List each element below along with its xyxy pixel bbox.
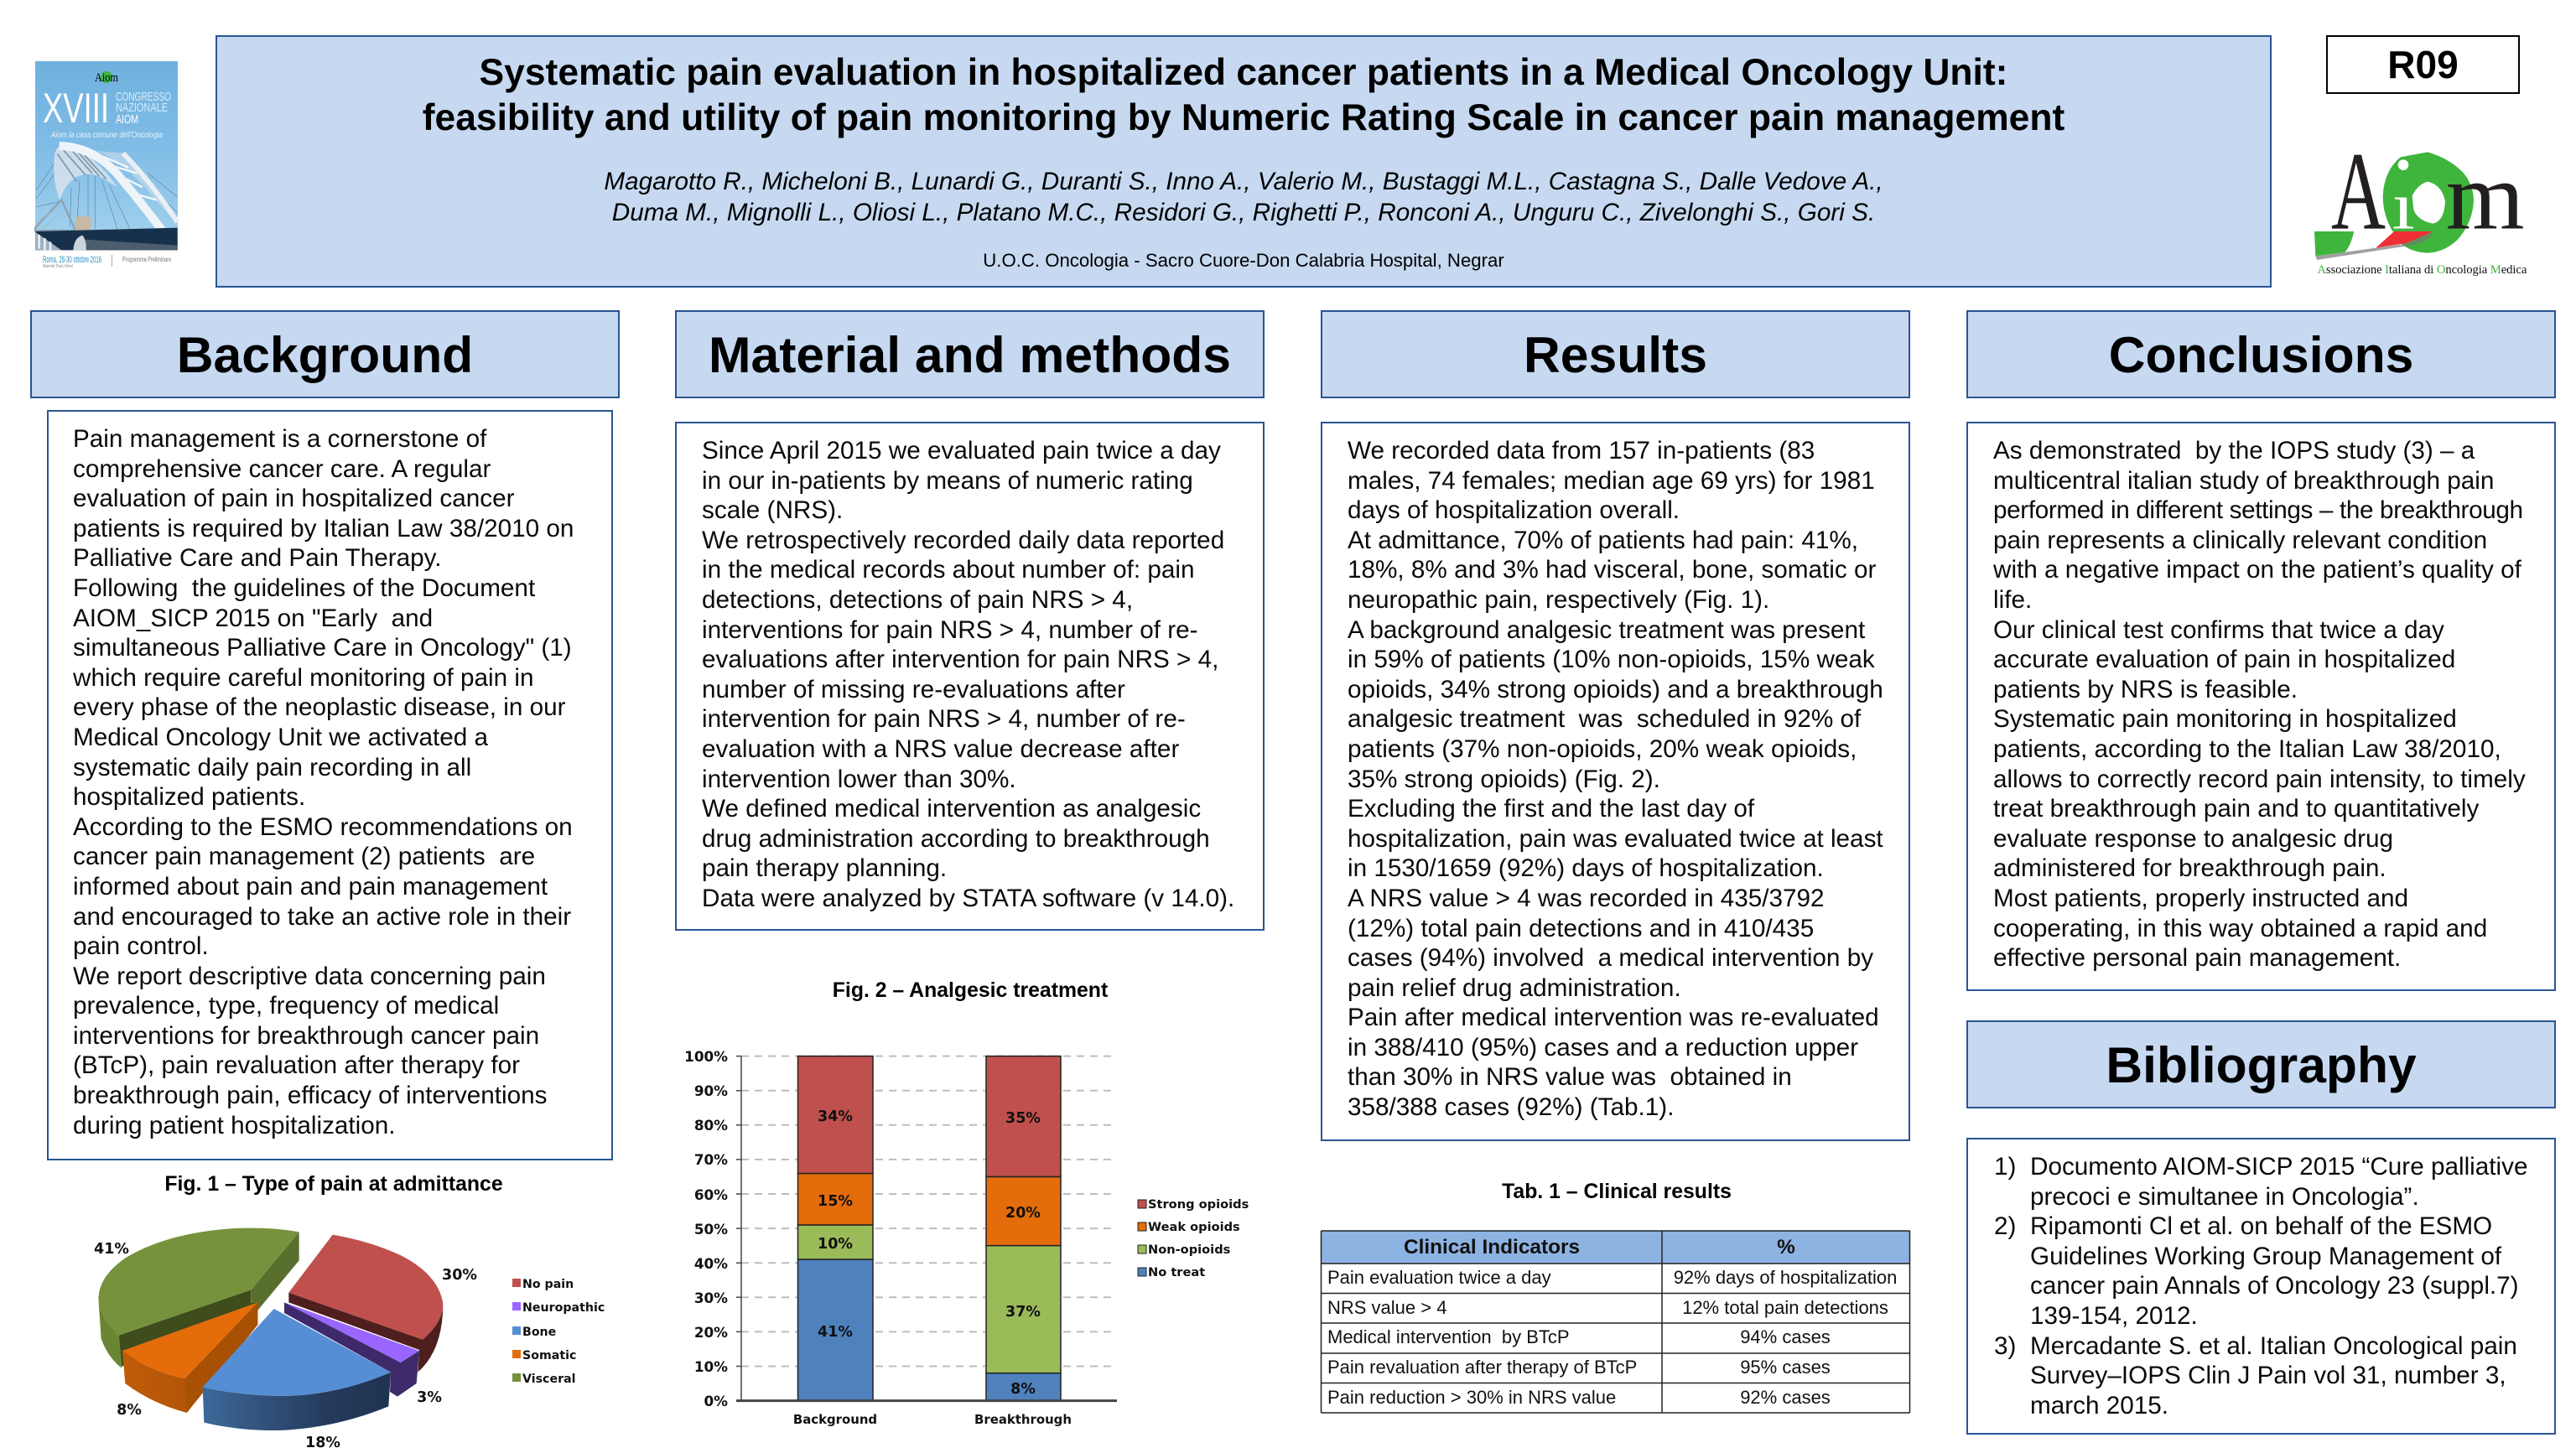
Tab. 1: clinical results table: NRS value > 4 — [1327, 1297, 1446, 1318]
Tab. 1: clinical results table: Medical intervention by BTcP — [1327, 1326, 1570, 1347]
Tab. 1: clinical results table: 92% days of hospitalization — [1674, 1267, 1897, 1288]
Fig. 2 legend: No treat — [1148, 1265, 1205, 1279]
Fig. 1 legend — [512, 1278, 605, 1386]
panel: Bibliography references — [1966, 1138, 2556, 1435]
bar: Background — [798, 1056, 873, 1400]
Fig. 2: stacked bar chart of analgesic treatment: 90% — [694, 1082, 728, 1099]
Fig. 1 legend: Bone — [522, 1326, 556, 1339]
conference programme cover: Marriott Park Hotel — [43, 264, 73, 269]
Fig. 2: stacked bar chart of analgesic treatment: 20% — [1005, 1205, 1041, 1222]
conference programme cover — [34, 61, 179, 269]
AIOM logo: Associazione Italiana di Oncologia Medica — [2317, 263, 2527, 277]
Tab. 1 title: Tab. 1 – Clinical results — [1502, 1181, 1732, 1203]
Fig. 2 title: Fig. 2 – Analgesic treatment — [833, 979, 1108, 1002]
reference text: Documento AIOM-SICP 2015 “Cure palliative precoci e simultanee in Oncologia”. Ripamonti Cl et al. on behalf of the ESMO Guidelines Working Group Management of cancer pain Annals of Oncology 23 (suppl.7) 139-154, 2012. Mercadante S. et al. Italian Oncological pain Survey–IOPS Clin J Pain vol 31, number 3, march 2015. — [2030, 1153, 2527, 1419]
Tab. 1: clinical results table: 94% cases — [1740, 1326, 1831, 1347]
Tab. 1: clinical results table: Clinical Indicators — [1404, 1236, 1580, 1259]
AIOM logo — [2314, 143, 2527, 277]
poster code R09: R09 — [2387, 43, 2459, 86]
panel: Results text: We recorded data from 157 in-patients (83 males, 74 females; median age 69 yrs) for 1981 days of hospitalization overall. At admittance, 70% of patients had pain: 41%, 18%, 8% and 3% had visceral, bone, somatic or neuropathic pain, respectively (Fig. 1). A background analgesic treatment was present in 59% of patients (10% non-opioids, 15% weak opioids, 34% strong opioids) and a breakthrough analgesic treatment was scheduled in 92% of patients (37% non-opioids, 20% weak opioids, 35% strong opioids) (Fig. 2). Excluding the first and the last day of hospitalization, pain was evaluated twice at least in 1530/1659 (92%) days of hospitalization. A NRS value > 4 was recorded in 435/3792 (12%) total pain detections and in 410/435 cases (94%) involved a medical intervention by pain relief drug administration. Pain after medical intervention was re-evaluated in 388/410 (95%) cases and a reduction upper than 30% in NRS value was obtained in 358/388 cases (92%) (Tab.1). — [1348, 437, 1883, 1121]
Fig. 2: stacked bar chart of analgesic treatment: 20% — [694, 1324, 728, 1341]
conference programme cover: XVIII — [43, 85, 109, 132]
Fig. 2 legend — [1138, 1197, 1249, 1279]
authors: Magarotto R., Micheloni B., Lunardi G., Duranti S., Inno A., Valerio M., Bustaggi M.L., Castagna S., Dalle Vedove A., Duma M., Mignolli L., Oliosi L., Platano M.C., Residori G., Righetti P., Ronconi A., Unguru C., Zivelonghi S., Gori S. — [604, 168, 1883, 226]
heading: Conclusions: Conclusions — [2109, 326, 2413, 383]
poster code R09 — [2326, 35, 2520, 94]
panel: Material and methods text: Since April 2015 we evaluated pain twice a day in our in-patients by means of numeric rating scale (NRS). We retrospectively recorded daily data reported in the medical records about number of: pain detections, detections of pain NRS > 4, interventions for pain NRS > 4, number of re- evaluations after intervention for pain NRS > 4, number of missing re-evaluations after intervention for pain NRS > 4, number of re- evaluation with a NRS value decrease after intervention lower than 30%. We defined medical intervention as analgesic drug administration according to breakthrough pain therapy planning. Data were analyzed by STATA software (v 14.0). — [702, 437, 1234, 912]
Fig. 2: stacked bar chart of analgesic treatment: 8% — [1010, 1381, 1036, 1398]
Fig. 2: stacked bar chart of analgesic treatment: Background — [793, 1412, 877, 1427]
Fig. 1: 3D pie chart of pain types: 8% — [117, 1402, 142, 1419]
heading: Results: Results — [1524, 326, 1707, 383]
Fig. 2: stacked bar chart of analgesic treatment: 34% — [818, 1108, 853, 1125]
Fig. 2: stacked bar chart of analgesic treatment: 80% — [694, 1117, 728, 1134]
panel: Conclusions text: As demonstrated by the IOPS study (3) – a multicentral italian study of breakthrough pain performed in different settings – the breakthrough pain represents a clinically relevant condition with a negative impact on the patient’s quality of life. Our clinical test confirms that twice a day accurate evaluation of pain in hospitalized patients by NRS is feasible. Systematic pain monitoring in hospitalized patients, according to the Italian Law 38/2010, allows to correctly record pain intensity, to timely treat breakthrough pain and to quantitatively evaluate response to analgesic drug administered for breakthrough pain. Most patients, properly instructed and cooperating, in this way obtained a rapid and effective personal pain management. — [1993, 437, 2526, 972]
Fig. 2: stacked bar chart of analgesic treatment: 30% — [694, 1290, 728, 1306]
Fig. 2: stacked bar chart of analgesic treatment: 41% — [818, 1324, 853, 1341]
Tab. 1: clinical results table: % — [1777, 1236, 1795, 1259]
conference programme cover: Roma, 28-30 ottobre 2016 — [43, 255, 101, 265]
slice: bone 18% — [203, 1309, 391, 1430]
Fig. 2 legend: Strong opioids — [1148, 1197, 1249, 1212]
Fig. 2: stacked bar chart of analgesic treatment: 0% — [704, 1393, 728, 1409]
slice: visceral 41% — [98, 1228, 299, 1368]
heading: Material and methods — [675, 310, 1265, 398]
poster title: Systematic pain evaluation in hospitalized cancer patients in a Medical Oncology Unit: feasibility and utility of pain monitoring by Numeric Rating Scale in cancer pain management — [423, 52, 2064, 138]
Fig. 2: stacked bar chart of analgesic treatment: 70% — [694, 1151, 728, 1168]
Fig. 1: 3D pie chart of pain types: 41% — [94, 1241, 129, 1258]
Fig. 1: 3D pie chart of pain types — [94, 1227, 605, 1448]
Fig. 1 legend: Visceral — [522, 1373, 576, 1386]
Fig. 2: stacked bar chart of analgesic treatment: Breakthrough — [974, 1412, 1072, 1427]
heading: Conclusions — [1966, 310, 2556, 398]
heading: Material and methods: Material and methods — [709, 326, 1231, 383]
Fig. 1 legend: No pain — [522, 1278, 574, 1291]
title panel — [216, 35, 2272, 288]
Tab. 1: clinical results table: Pain evaluation twice a day — [1327, 1267, 1551, 1288]
Fig. 2: stacked bar chart of analgesic treatment — [684, 1048, 1249, 1427]
Fig. 2: stacked bar chart of analgesic treatment: 50% — [694, 1221, 728, 1238]
Fig. 2: stacked bar chart of analgesic treatment: 10% — [818, 1236, 853, 1253]
Fig. 2: stacked bar chart of analgesic treatment: 100% — [684, 1048, 728, 1065]
Fig. 1: 3D pie chart of pain types: 3% — [417, 1389, 442, 1406]
Tab. 1: clinical results table: Pain reduction > 30% in NRS value — [1327, 1387, 1616, 1408]
Fig. 2: stacked bar chart of analgesic treatment: 60% — [694, 1186, 728, 1203]
heading: Bibliography — [1966, 1020, 2556, 1108]
reference numbers: 1) 2) 3) — [1994, 1153, 2016, 1360]
AIOM logo: m — [2446, 143, 2525, 250]
slice: neuropathic 3% — [284, 1302, 419, 1397]
Fig. 2: stacked bar chart of analgesic treatment: 10% — [694, 1358, 728, 1375]
Fig. 2: stacked bar chart of analgesic treatment: 35% — [1005, 1110, 1041, 1127]
Tab. 1: clinical results table: Pain revaluation after therapy of BTcP — [1327, 1357, 1637, 1378]
Fig. 1 legend: Somatic — [522, 1349, 576, 1362]
heading: Bibliography: Bibliography — [2106, 1036, 2417, 1093]
conference programme cover: Aiom — [95, 71, 118, 85]
heading: Background — [30, 310, 620, 398]
Fig. 2: stacked bar chart of analgesic treatment: 40% — [694, 1255, 728, 1272]
Fig. 1 title: Fig. 1 – Type of pain at admittance — [164, 1173, 503, 1196]
Tab. 1: clinical results table — [1320, 1230, 1910, 1414]
Tab. 1: clinical results table: 92% cases — [1740, 1387, 1831, 1408]
Fig. 1 legend: Neuropathic — [522, 1301, 605, 1315]
Tab. 1: clinical results table: 95% cases — [1740, 1357, 1831, 1378]
panel: Background text: Pain management is a cornerstone of comprehensive cancer care. A regular evaluation of pain in hospitalized cancer patients is required by Italian Law 38/2010 on Palliative Care and Pain Therapy. Following the guidelines of the Document AIOM_SICP 2015 on "Early and simultaneous Palliative Care in Oncology" (1) which require careful monitoring of pain in every phase of the neoplastic disease, in our Medical Oncology Unit we activated a systematic daily pain recording in all hospitalized patients. According to the ESMO recommendations on cancer pain management (2) patients are informed about pain and pain management and encouraged to take an active role in their pain control. We report descriptive data concerning pain prevalence, type, frequency of medical interventions for breakthrough cancer pain (BTcP), pain revaluation after therapy for breakthrough pain, efficacy of interventions during patient hospitalization. — [73, 425, 574, 1139]
Fig. 1: 3D pie chart of pain types: 30% — [442, 1267, 477, 1284]
Fig. 2 legend: Weak opioids — [1148, 1220, 1240, 1234]
slice: no pain 30% — [288, 1235, 443, 1373]
bar: Breakthrough — [986, 1056, 1061, 1401]
heading: Results — [1321, 310, 1910, 398]
Fig. 2 legend: Non-opioids — [1148, 1243, 1230, 1257]
Fig. 2: stacked bar chart of analgesic treatment: 37% — [1005, 1304, 1041, 1321]
affiliation: U.O.C. Oncologia - Sacro Cuore-Don Calabria Hospital, Negrar — [983, 250, 1504, 271]
conference programme cover: AIOM — [116, 112, 138, 127]
Tab. 1: clinical results table: 12% total pain detections — [1682, 1297, 1888, 1318]
AIOM logo: ı — [2392, 170, 2415, 244]
Fig. 2: stacked bar chart of analgesic treatment: 15% — [818, 1193, 853, 1210]
slice: somatic 8% — [122, 1302, 257, 1413]
heading: Background: Background — [177, 326, 473, 383]
